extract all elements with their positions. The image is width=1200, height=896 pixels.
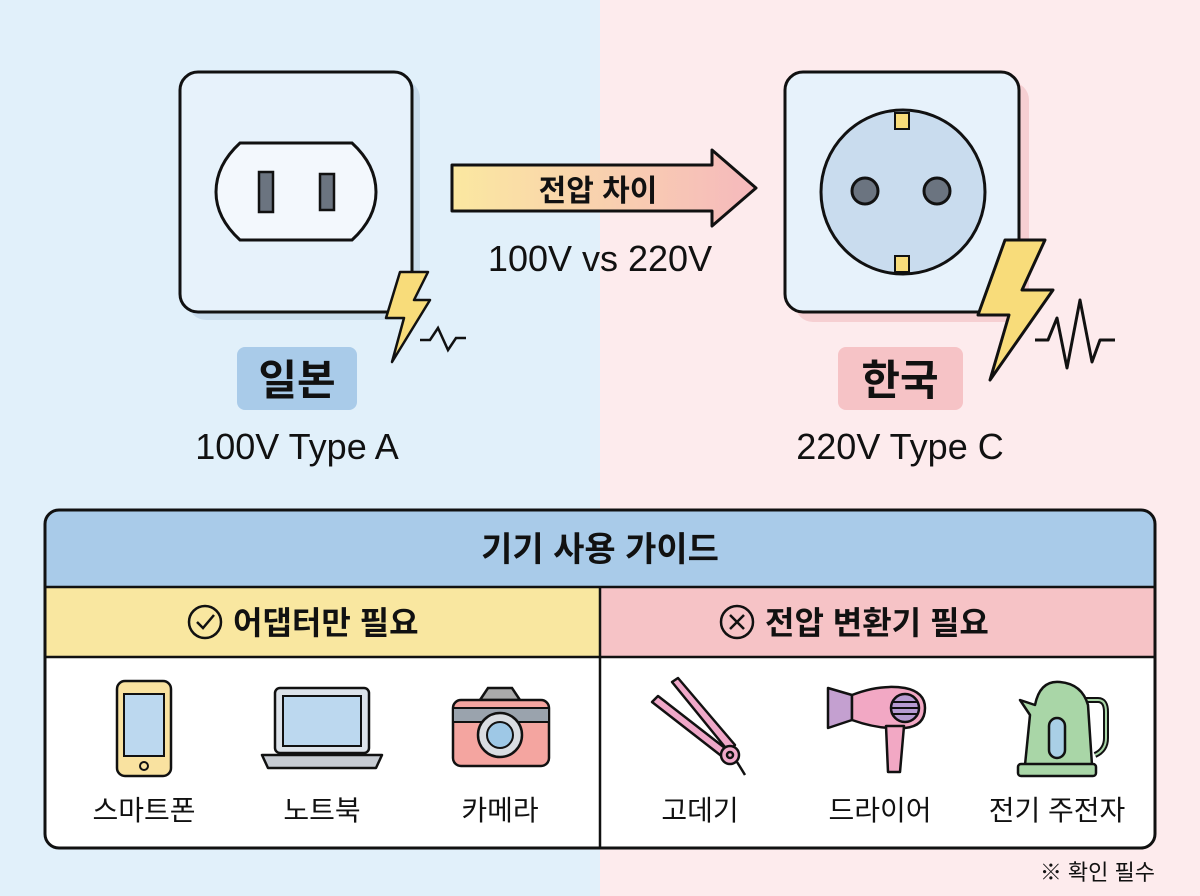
- text: 고데기: 고데기: [661, 795, 739, 826]
- heading: guide title: 기기 사용 가이드: [481, 531, 719, 569]
- icon: Japan outlet Type A: [180, 72, 420, 320]
- icon: big lightning Korea: [978, 240, 1115, 380]
- text: 220V Type C: 220V Type C: [796, 426, 1004, 467]
- label: 한국: [838, 347, 963, 410]
- subheader: voltage converter needed: [600, 587, 1155, 657]
- panel: device usage guide: [45, 510, 1155, 848]
- heading: guide title: [45, 510, 1155, 587]
- arrow: voltage difference: [452, 150, 756, 226]
- icon: electric kettle: [1018, 682, 1106, 776]
- text: 카메라: 카메라: [461, 795, 539, 826]
- icon: smartphone: [117, 681, 171, 776]
- subheader: adapter only: 어댑터만 필요: [233, 605, 419, 641]
- icon: Korea outlet Type C: [785, 72, 1029, 322]
- footnote: ※ 확인 필수: [1040, 860, 1155, 885]
- text: 스마트폰: 스마트폰: [92, 795, 196, 826]
- subheader: voltage converter needed: 전압 변환기 필요: [765, 605, 989, 641]
- icon: hair dryer: [828, 687, 925, 772]
- icon: camera: [453, 688, 549, 766]
- text: 드라이어: 드라이어: [828, 795, 932, 826]
- subheader: adapter only: [45, 587, 600, 657]
- label: 한국: 한국: [861, 357, 939, 404]
- text: 노트북: 노트북: [283, 795, 361, 826]
- icon: laptop: [262, 688, 382, 768]
- icon: hair straightener: [652, 678, 745, 775]
- label: 일본: [237, 347, 357, 410]
- label: 일본: 일본: [258, 357, 336, 404]
- text: 전기 주전자: 전기 주전자: [989, 795, 1125, 826]
- arrow: voltage difference: 전압 차이: [539, 175, 657, 208]
- text: 100V Type A: 100V Type A: [195, 426, 399, 467]
- icon: small lightning Japan: [386, 272, 466, 362]
- text: 100V vs 220V: 100V vs 220V: [488, 238, 712, 279]
